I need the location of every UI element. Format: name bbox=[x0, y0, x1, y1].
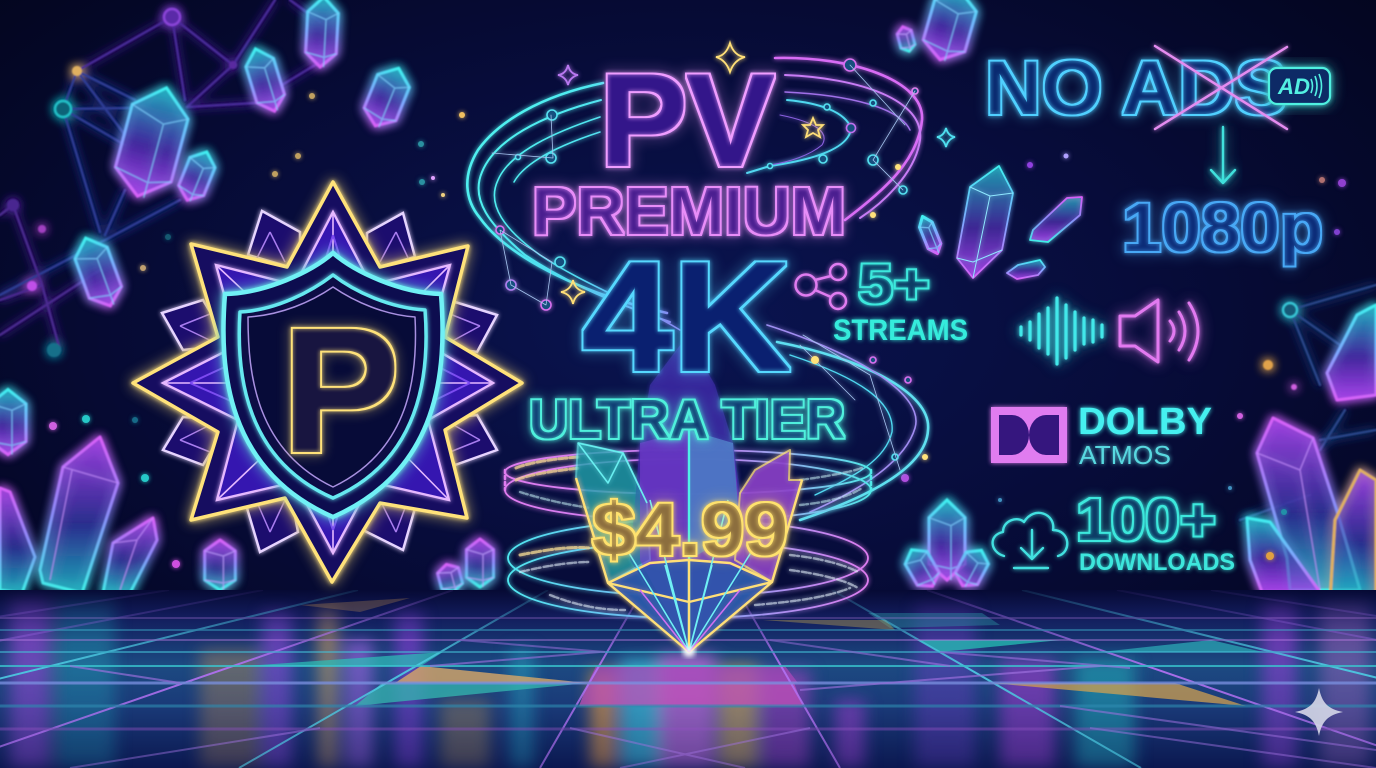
floor grid bbox=[0, 590, 1376, 768]
upper ring bbox=[505, 450, 871, 521]
icon: dolby mark bbox=[991, 407, 1067, 463]
streams label: STREAMS bbox=[833, 314, 968, 347]
emblem back squares bbox=[162, 211, 497, 552]
title: PREMIUM: PREMIUM bbox=[532, 174, 846, 249]
atmos wordmark: ATMOS bbox=[1079, 440, 1171, 470]
emblem lavender star bbox=[163, 212, 493, 553]
downloads number: 100+ bbox=[1076, 487, 1216, 553]
icon: sound waveform bbox=[1021, 298, 1102, 364]
price: $4.99 bbox=[592, 488, 788, 571]
sparkle stars bbox=[558, 43, 955, 304]
emblem yellow star bbox=[133, 182, 522, 582]
dolby wordmark: DOLBY bbox=[1078, 401, 1212, 443]
crystals upper right of centre bbox=[896, 0, 981, 66]
streams feature bbox=[796, 252, 968, 347]
central crystal bbox=[576, 336, 802, 656]
cross out bbox=[1155, 46, 1287, 129]
crystals beside streams bbox=[916, 166, 1082, 279]
crystal cluster lower left bbox=[0, 437, 494, 594]
downloads label: DOWNLOADS bbox=[1079, 549, 1235, 576]
title: PV: PV bbox=[600, 47, 774, 193]
lower ring bbox=[508, 520, 868, 618]
no ads feature bbox=[985, 46, 1330, 131]
title: 4K: 4K bbox=[582, 230, 790, 403]
particles bbox=[49, 93, 1346, 568]
no ads text: NO ADS bbox=[985, 46, 1287, 131]
dolby atmos logo bbox=[991, 401, 1212, 470]
icon: sparkle watermark bbox=[1295, 688, 1343, 736]
icon: ad badge: AD bbox=[1277, 74, 1310, 99]
orbit spiral bbox=[467, 58, 928, 520]
icon: ad badge bbox=[1269, 68, 1330, 104]
emblem: star badge with shield bbox=[133, 182, 522, 582]
floating crystals upper left bbox=[0, 0, 414, 455]
downloads feature bbox=[993, 487, 1235, 576]
icon: cloud download bbox=[993, 513, 1067, 568]
icon: share bbox=[796, 264, 846, 309]
streams number: 5+ bbox=[858, 252, 930, 315]
emblem letter P: P bbox=[282, 293, 399, 489]
floor reflections bbox=[10, 595, 1370, 768]
floor coloured panels bbox=[246, 598, 1263, 706]
left constellation network bbox=[0, 0, 320, 357]
reflective floor bbox=[0, 590, 1376, 768]
1080p text: 1080p bbox=[1122, 189, 1323, 266]
arrow down bbox=[1211, 127, 1235, 183]
right constellation network bbox=[1240, 285, 1376, 520]
crystal cluster lower right bbox=[1247, 305, 1376, 600]
crystal cluster lower middle right bbox=[901, 500, 993, 592]
data rings bbox=[505, 450, 871, 618]
icon: speaker bbox=[1120, 300, 1198, 362]
title: ULTRA TIER: ULTRA TIER bbox=[529, 388, 845, 450]
emblem shield bbox=[223, 253, 443, 517]
